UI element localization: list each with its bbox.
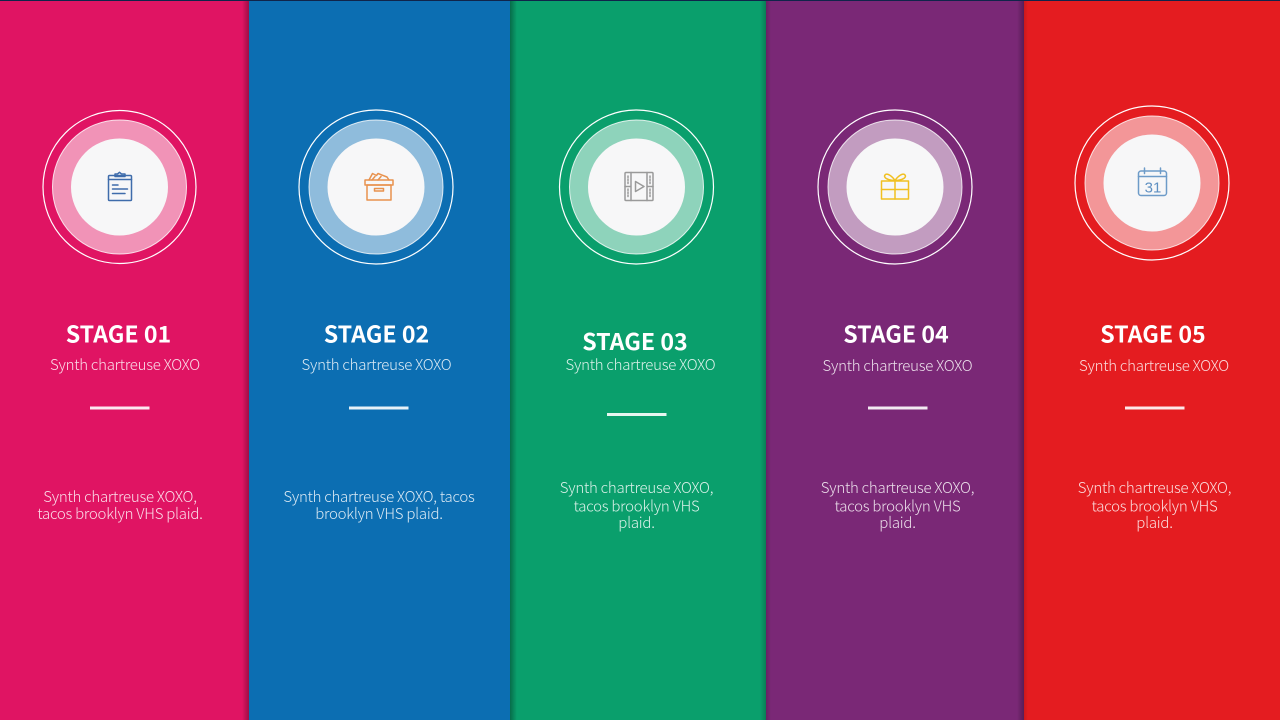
description: Synth chartreuse XOXO,	[821, 477, 974, 498]
description: Synth chartreuse XOXO,	[43, 486, 197, 507]
stage 03 column	[560, 110, 715, 533]
panel: stage 03 background	[510, 1, 766, 720]
icon badge: archive box	[299, 110, 453, 264]
icon: archive box	[365, 174, 393, 200]
subtitle: Synth chartreuse XOXO	[566, 354, 715, 375]
heading: stage 05: STAGE 05	[1100, 316, 1206, 350]
description: tacos brooklyn VHS	[574, 496, 700, 516]
divider	[607, 413, 666, 416]
divider	[349, 406, 408, 410]
icon badge: gift	[818, 110, 972, 264]
stage 02 column	[283, 110, 475, 524]
description: Synth chartreuse XOXO,	[560, 477, 713, 498]
calendar date: 31	[1145, 180, 1161, 196]
panel: stage 04 background	[766, 1, 1024, 720]
icon badge: clipboard	[43, 110, 196, 264]
subtitle: Synth chartreuse XOXO	[302, 354, 451, 375]
heading: stage 04: STAGE 04	[843, 316, 949, 350]
panel: stage 05 background	[1024, 1, 1280, 720]
heading: stage 02: STAGE 02	[324, 316, 429, 350]
description: Synth chartreuse XOXO, tacos	[283, 486, 475, 507]
description: plaid.	[879, 512, 916, 533]
description: plaid.	[618, 512, 655, 533]
stage 01 column	[37, 110, 203, 524]
panel: stage 02 background	[249, 1, 510, 720]
stage 05 column	[1075, 106, 1231, 533]
description: tacos brooklyn VHS	[1092, 496, 1218, 516]
heading: stage 03: STAGE 03	[582, 323, 688, 357]
description: tacos brooklyn VHS plaid.	[37, 503, 203, 524]
icon: gift box	[882, 174, 908, 199]
stage 04 column	[818, 110, 974, 533]
subtitle: Synth chartreuse XOXO	[1079, 355, 1229, 376]
icon: clipboard	[108, 172, 132, 200]
description: plaid.	[1136, 512, 1173, 533]
icon: calendar	[1138, 168, 1166, 196]
icon: film strip	[625, 172, 653, 200]
divider	[868, 406, 928, 410]
panel: stage 01 background	[0, 1, 249, 720]
description: Synth chartreuse XOXO,	[1078, 477, 1231, 498]
heading: stage 01: STAGE 01	[66, 316, 171, 350]
description: tacos brooklyn VHS	[835, 496, 961, 516]
description: brooklyn VHS plaid.	[315, 503, 443, 524]
icon badge: calendar	[1075, 106, 1229, 260]
subtitle: Synth chartreuse XOXO	[50, 354, 200, 375]
icon badge: film	[560, 110, 714, 264]
divider	[90, 406, 150, 410]
divider	[1125, 406, 1184, 410]
subtitle: Synth chartreuse XOXO	[823, 355, 972, 376]
